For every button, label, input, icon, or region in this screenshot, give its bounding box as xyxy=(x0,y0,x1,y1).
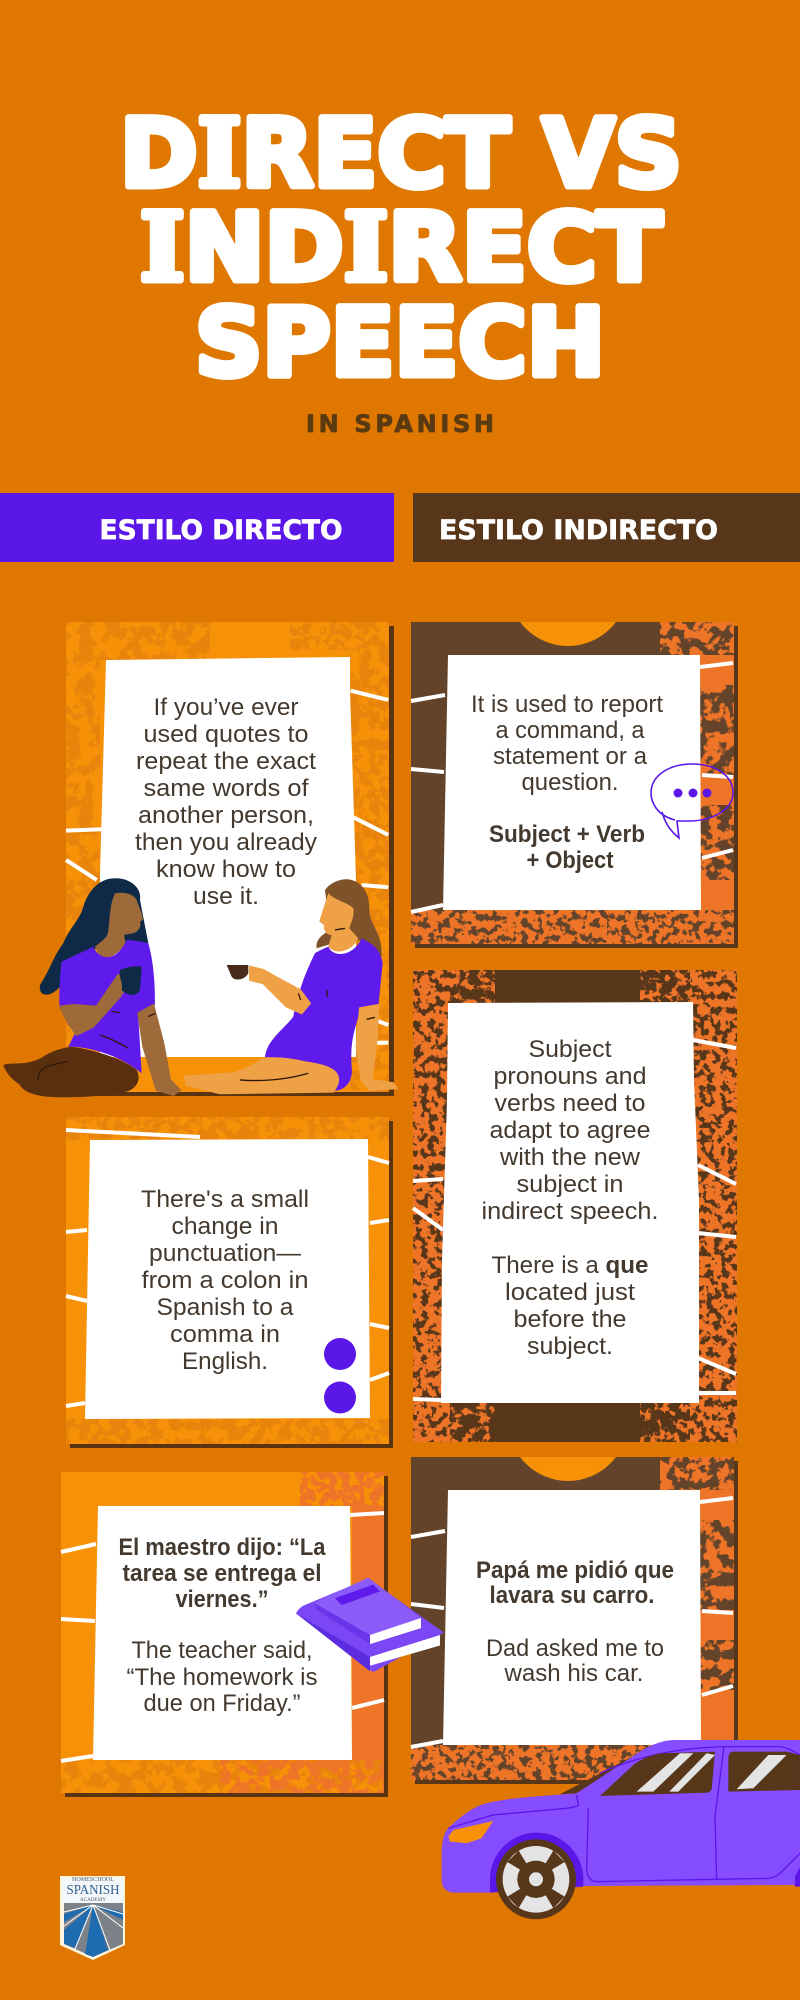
illustration: two women xyxy=(3,878,397,1097)
text: punctuation: English. xyxy=(182,1348,268,1375)
title: SPEECH xyxy=(195,289,605,398)
logo: Homeschool Spanish Academy: HOMESCHOOL xyxy=(72,1877,114,1883)
text: subject pronouns: indirect speech. xyxy=(482,1198,658,1225)
icon: books xyxy=(296,1578,444,1672)
text: direct definition: then you already xyxy=(135,829,317,856)
logo: Homeschool Spanish Academy xyxy=(60,1876,125,1960)
car wheel xyxy=(496,1839,576,1919)
text: subject pronouns: with the new xyxy=(499,1144,641,1171)
panel: indirect definition xyxy=(410,622,738,948)
text: punctuation: from a colon in xyxy=(142,1267,308,1294)
title xyxy=(120,99,682,398)
text: direct definition: repeat the exact xyxy=(136,748,316,775)
text: direct example: El maestro dijo: “La xyxy=(118,1534,326,1561)
banner: estilo directo: ESTILO DIRECTO xyxy=(100,515,342,546)
text: indirect definition: It is used to report xyxy=(471,691,663,718)
subtitle: IN SPANISH xyxy=(306,410,494,438)
text: indirect definition xyxy=(471,691,663,874)
woman with mug xyxy=(3,878,180,1097)
icon: speech bubble xyxy=(651,764,733,838)
text: direct example xyxy=(118,1534,326,1717)
text: direct example: “The homework is xyxy=(126,1664,318,1691)
banner: estilo directo xyxy=(0,493,394,562)
text: direct definition: know how to xyxy=(156,856,296,883)
icon: colon dots xyxy=(324,1338,356,1414)
text: direct example: due on Friday.” xyxy=(144,1690,300,1717)
banner: estilo indirecto xyxy=(413,493,800,562)
text: subject pronouns: adapt to agree xyxy=(490,1117,650,1144)
text: indirect definition: statement or a xyxy=(493,743,648,770)
text: subject pronouns: There is a que xyxy=(492,1252,648,1279)
text: subject pronouns: verbs need to xyxy=(494,1090,646,1117)
text: direct definition: use it. xyxy=(193,883,259,910)
text: indirect definition: a command, a xyxy=(496,717,645,744)
woman with cup xyxy=(185,879,397,1093)
logo: Homeschool Spanish Academy: ACADEMY xyxy=(80,1897,106,1903)
text: direct definition: another person, xyxy=(138,802,314,829)
panel: direct example xyxy=(61,1472,388,1797)
text: indirect example: wash his car. xyxy=(503,1660,644,1687)
text: indirect example: Dad asked me to xyxy=(486,1635,664,1662)
text: punctuation: change in xyxy=(172,1213,278,1240)
panel: direct definition xyxy=(66,622,394,1096)
text: subject pronouns xyxy=(482,1036,658,1360)
title: DIRECT VS xyxy=(120,99,682,209)
text: punctuation: Spanish to a xyxy=(156,1294,294,1321)
text: punctuation xyxy=(141,1186,309,1375)
panel: punctuation xyxy=(66,1117,393,1448)
text: direct definition: same words of xyxy=(144,775,309,802)
text: indirect definition: + Object xyxy=(526,847,614,874)
icon: purple car xyxy=(442,1740,800,1919)
text: punctuation: comma in xyxy=(170,1321,280,1348)
text: indirect definition: question. xyxy=(522,769,618,796)
text: subject pronouns: before the xyxy=(514,1306,626,1333)
text: indirect definition: Subject + Verb xyxy=(489,821,645,848)
panel: subject pronouns xyxy=(413,970,737,1442)
text: subject pronouns: located just xyxy=(505,1279,635,1306)
text: subject pronouns: Subject xyxy=(528,1036,612,1063)
text: direct definition xyxy=(135,694,317,910)
panel: indirect example xyxy=(410,1457,738,1784)
banner: estilo indirecto: ESTILO INDIRECTO xyxy=(439,515,718,546)
text: indirect example: Papá me pidió que xyxy=(476,1557,674,1584)
logo: Homeschool Spanish Academy: SPANISH xyxy=(66,1883,120,1898)
text: punctuation: There's a small xyxy=(141,1186,309,1213)
text: indirect example xyxy=(476,1557,674,1687)
text: direct definition: used quotes to xyxy=(144,721,308,748)
text: direct example: The teacher said, xyxy=(132,1637,312,1664)
text: subject pronouns: pronouns and xyxy=(494,1063,646,1090)
text: punctuation: punctuation— xyxy=(149,1240,301,1267)
text: indirect example: lavara su carro. xyxy=(490,1582,654,1609)
text: direct definition: If you’ve ever xyxy=(154,694,299,721)
text: subject pronouns: subject. xyxy=(527,1333,613,1360)
text: direct example: tarea se entrega el xyxy=(122,1560,322,1587)
title: INDIRECT xyxy=(140,193,662,303)
text: subject pronouns: subject in xyxy=(516,1171,624,1198)
text: direct example: viernes.” xyxy=(176,1586,268,1613)
